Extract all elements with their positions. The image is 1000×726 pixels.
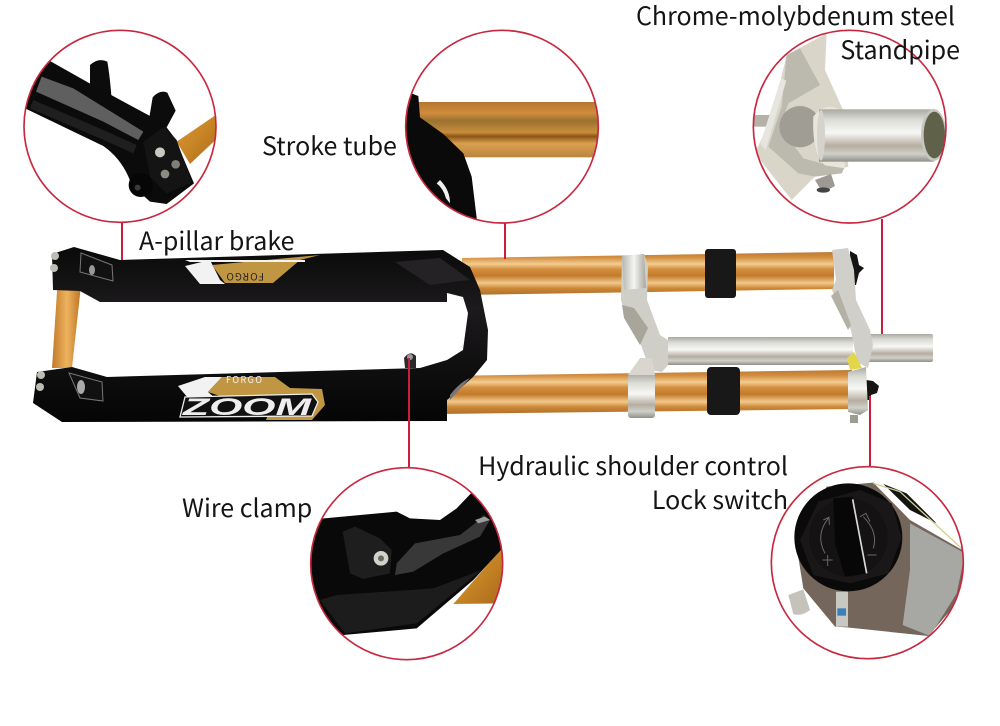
decal text: forgo: FORGO: [226, 373, 262, 386]
lower stanchion tube: [440, 370, 852, 414]
upper stanchion tube: [462, 252, 834, 295]
wire clamp: [404, 353, 416, 368]
leg highlights: [69, 253, 470, 401]
detail circle: wire clamp: [307, 468, 503, 660]
label: standpipe: Standpipe: [840, 31, 960, 67]
circle outline: [406, 30, 598, 223]
circle outline: [311, 468, 503, 660]
detail circle: stroke tube: [403, 30, 600, 223]
label: lock switch: Lock switch: [652, 481, 788, 517]
silver crown clamps: [621, 248, 873, 423]
leader lines: [122, 219, 882, 467]
black lower legs: [33, 247, 488, 422]
detail circle: brake mount: [20, 30, 218, 222]
detail circle: lock switch: [771, 467, 965, 659]
upper decal: [185, 255, 320, 285]
right knobs: [850, 251, 879, 400]
steerer tube: [668, 334, 933, 365]
circle outline: [753, 30, 946, 223]
label: a-pillar brake: A-pillar brake: [139, 222, 295, 258]
gold axle: [52, 276, 82, 368]
decal text: forgo upside down: FORGO: [226, 270, 264, 285]
mount bolts: [36, 252, 59, 391]
label: stroke tube: Stroke tube: [262, 127, 397, 163]
circle outline: [24, 30, 216, 222]
black rubber bands: [705, 249, 740, 415]
circle outline: [771, 467, 963, 659]
label: wire clamp: Wire clamp: [182, 489, 312, 525]
lower decal: [178, 373, 325, 421]
fork assembly: [33, 247, 933, 423]
label: hydraulic shoulder control: Hydraulic shoulder control: [478, 447, 788, 483]
detail circle: standpipe: [752, 30, 946, 223]
decal text: zoom: ZOOM: [181, 394, 313, 421]
